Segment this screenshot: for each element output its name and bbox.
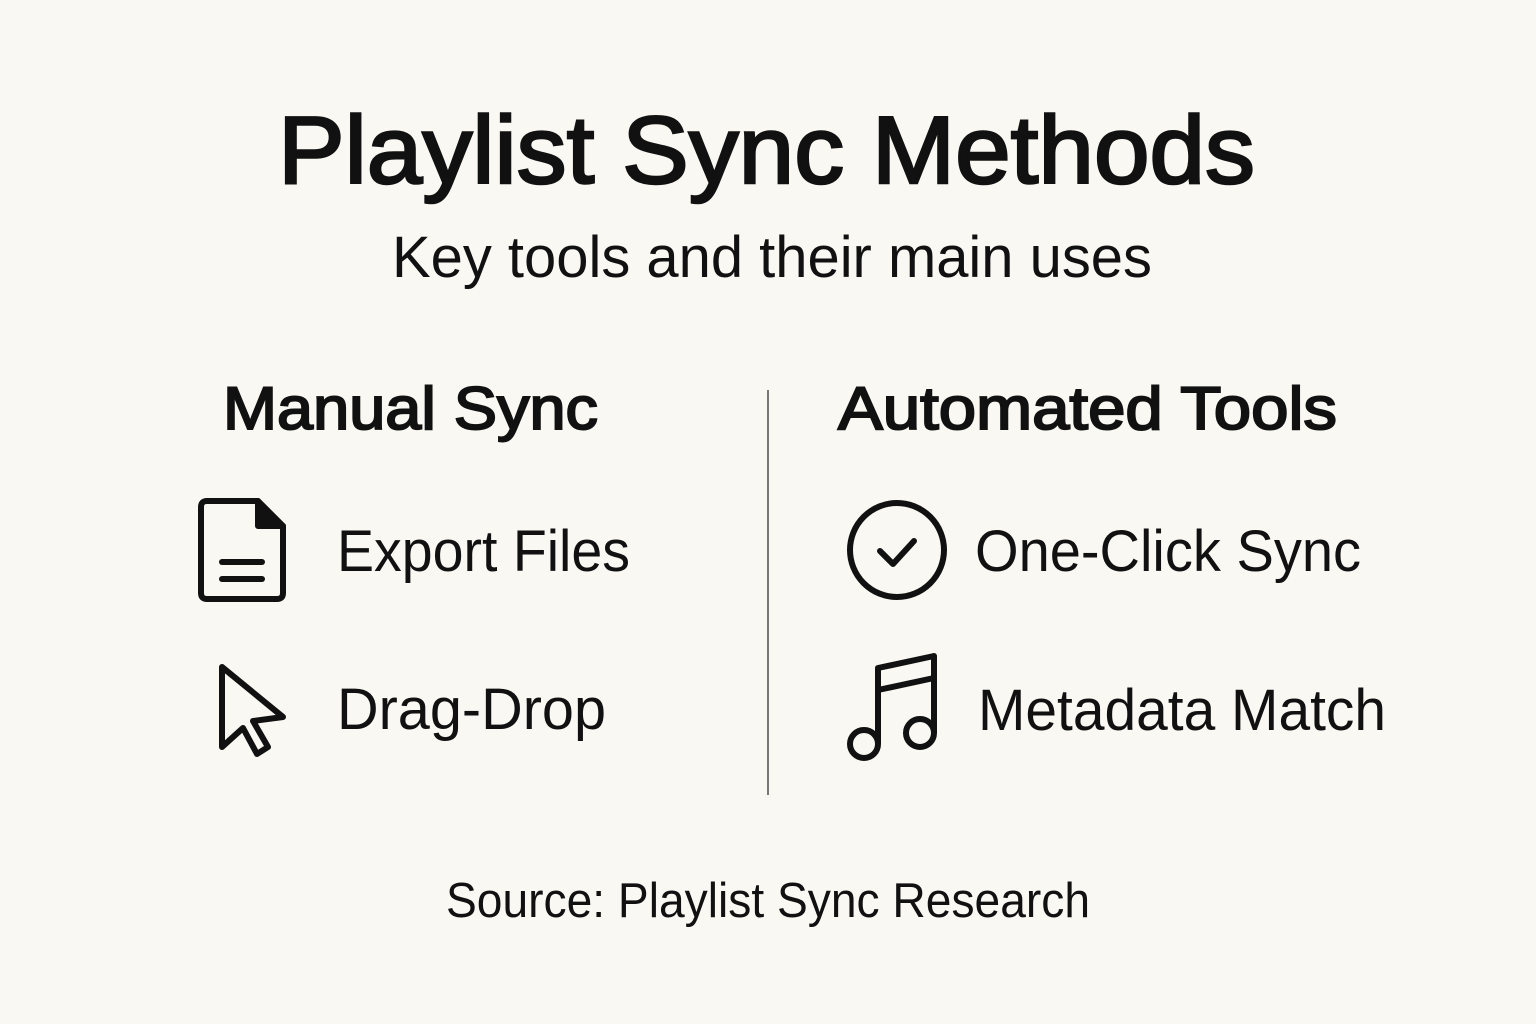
icon: check circle [850, 503, 944, 597]
text: One-Click Sync: One-Click Sync [975, 519, 1361, 584]
heading: Manual Sync: Manual Sync [223, 375, 598, 442]
subtitle: Key tools and their main uses [392, 225, 1152, 290]
title: Playlist Sync Methods [278, 97, 1255, 204]
text: Drag-Drop: Drag-Drop [337, 677, 606, 742]
source: Source: Playlist Sync Research [446, 874, 1090, 928]
panel: automated tools [838, 375, 1386, 758]
panel: manual sync [201, 375, 630, 754]
text: Metadata Match: Metadata Match [978, 678, 1386, 743]
icon: cursor [222, 667, 283, 754]
heading: Automated Tools: Automated Tools [838, 375, 1337, 442]
icon: music note [850, 656, 934, 758]
divider [767, 390, 769, 795]
text: Export Files: Export Files [337, 519, 630, 584]
icon: document [201, 501, 283, 599]
